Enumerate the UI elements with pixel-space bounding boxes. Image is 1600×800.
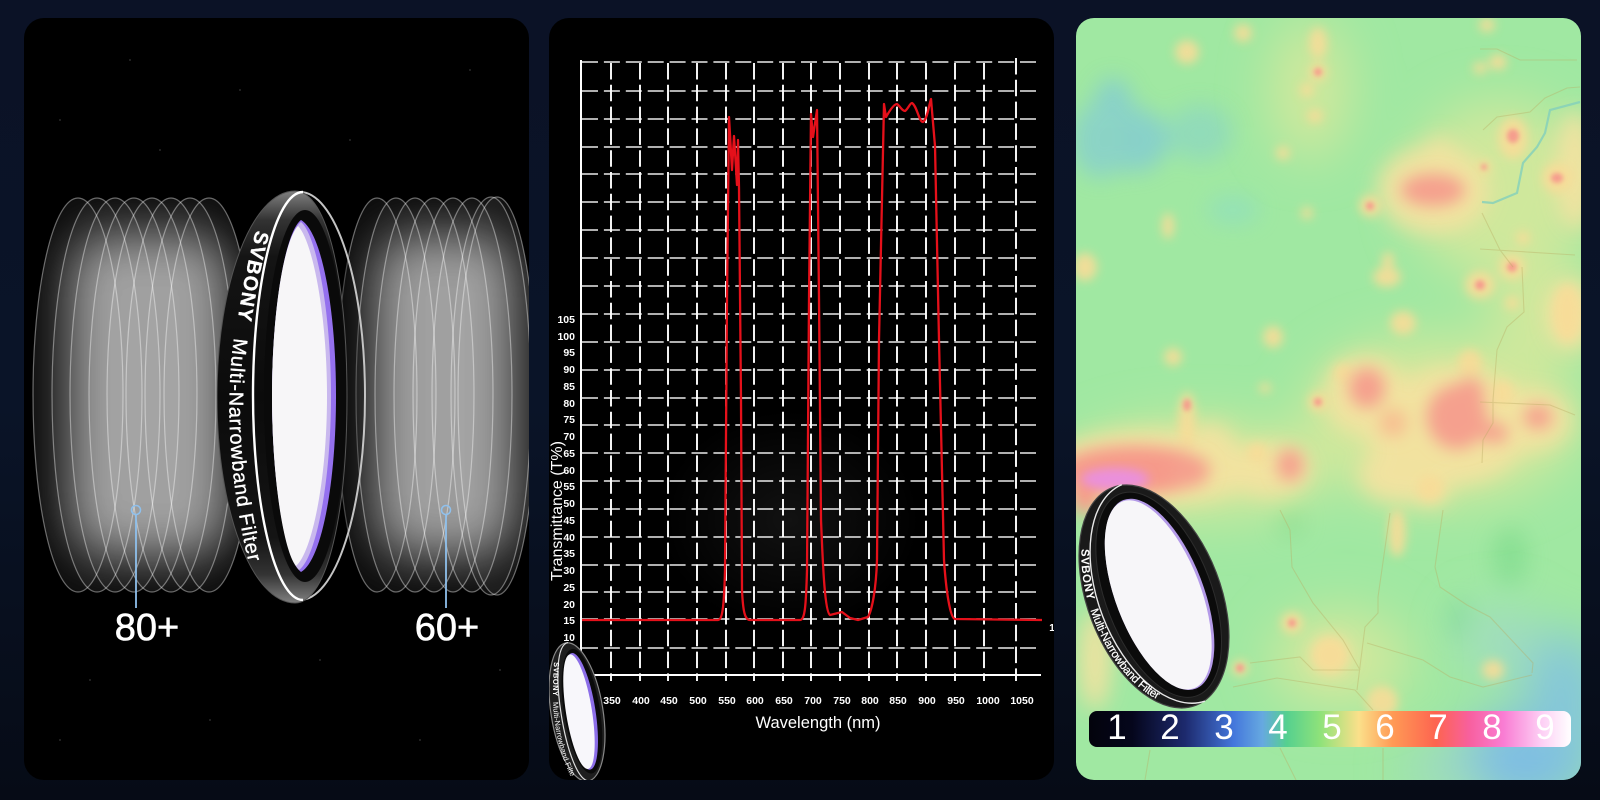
label: small lens brand: SVBONY	[552, 662, 560, 696]
x axis tick labels: 700	[804, 695, 822, 707]
label: lens brand: SVBONY	[238, 231, 268, 322]
icon: main filter lens	[216, 190, 366, 604]
panel: filter stack comparison	[24, 18, 529, 780]
y axis tick labels: 105	[557, 314, 575, 326]
x axis tick labels: 1050	[1010, 695, 1034, 707]
icon: small filter lens	[549, 642, 606, 780]
y axis tick labels: 10	[563, 632, 575, 644]
left stack of filters	[33, 198, 254, 592]
map city cores	[1183, 68, 1563, 672]
legend: brightness scale: 4	[1268, 708, 1288, 747]
legend: brightness scale: 1	[1107, 708, 1127, 747]
y axis tick labels: 50	[563, 498, 575, 510]
legend: brightness scale	[1089, 708, 1571, 747]
y axis tick labels: 70	[563, 431, 575, 443]
right stack of filters	[337, 197, 536, 595]
map cool regions	[1072, 78, 1532, 640]
legend: brightness scale: 5	[1322, 708, 1342, 747]
panel: transmittance chart	[549, 18, 1054, 780]
chart grid	[580, 58, 1041, 681]
x axis tick labels: 1000	[976, 695, 1000, 707]
river	[1482, 102, 1580, 203]
x axis tick labels: 450	[660, 695, 678, 707]
legend: brightness scale: 3	[1214, 708, 1234, 747]
y axis tick labels: 45	[563, 515, 575, 527]
y axis tick labels: 40	[563, 532, 575, 544]
nebula glow	[722, 462, 858, 578]
x axis tick labels: 600	[746, 695, 764, 707]
roads	[1145, 49, 1580, 780]
label: tilted lens brand: SVBONY	[1081, 549, 1096, 598]
map broad glow	[1040, 110, 1595, 710]
label: lens model: Multi-Narrowband Filter	[229, 339, 260, 560]
x axis tick labels: 400	[632, 695, 650, 707]
x axis tick labels: 900	[918, 695, 936, 707]
map dark sky corner	[1402, 596, 1581, 780]
y axis tick labels: 90	[563, 364, 575, 376]
label: small lens model: Multi-Narrowband Filter	[553, 702, 574, 776]
legend: brightness scale: 7	[1428, 708, 1448, 747]
y axis tick labels: 55	[563, 481, 575, 493]
y axis tick labels: 20	[563, 599, 575, 611]
x axis tick labels	[604, 697, 1034, 704]
y axis title: Transmittance (T%)	[549, 441, 566, 581]
y axis tick labels: 60	[563, 465, 575, 477]
callout: 60+: 60+	[415, 607, 479, 649]
y axis tick labels: 15	[563, 615, 575, 627]
map city glows	[1073, 18, 1581, 718]
legend: brightness scale: 2	[1160, 708, 1180, 747]
panel: light pollution map	[1076, 18, 1581, 780]
x axis tick labels: 750	[833, 695, 851, 707]
icon: tilted filter lens	[1078, 484, 1230, 709]
map urban centres	[1060, 174, 1552, 515]
y axis tick labels: 35	[563, 548, 575, 560]
star field	[59, 59, 501, 741]
curve end label: 1	[1049, 623, 1055, 634]
callout: 60+	[415, 506, 479, 649]
x axis tick labels: 950	[947, 695, 965, 707]
y axis tick labels: 85	[563, 381, 575, 393]
map brightest zone	[1081, 468, 1149, 490]
x axis tick labels: 350	[603, 695, 621, 707]
y axis tick labels: 25	[563, 582, 575, 594]
legend: brightness scale: 9	[1535, 708, 1555, 747]
x axis tick labels: 800	[861, 695, 879, 707]
label: tilted lens model: Multi-Narrowband Filter	[1090, 608, 1160, 699]
x axis tick labels: 500	[689, 695, 707, 707]
y axis tick labels: 80	[563, 398, 575, 410]
x axis tick labels: 650	[775, 695, 793, 707]
y axis tick labels: 95	[563, 347, 575, 359]
y axis tick labels: 30	[563, 565, 575, 577]
y axis tick labels	[557, 314, 575, 644]
x axis tick labels: 550	[718, 695, 736, 707]
callout: 80+: 80+	[115, 607, 179, 649]
legend: brightness scale: 8	[1482, 708, 1502, 747]
y axis tick labels: 100	[557, 331, 575, 343]
x axis tick labels: 850	[889, 695, 907, 707]
x axis title: Wavelength (nm)	[755, 714, 881, 732]
legend: brightness scale: 6	[1375, 708, 1395, 747]
callout: 80+	[115, 506, 179, 649]
y axis tick labels: 65	[563, 448, 575, 460]
transmittance curve	[582, 99, 1042, 620]
map regional wash	[1070, 20, 1590, 710]
y axis tick labels: 75	[563, 414, 575, 426]
